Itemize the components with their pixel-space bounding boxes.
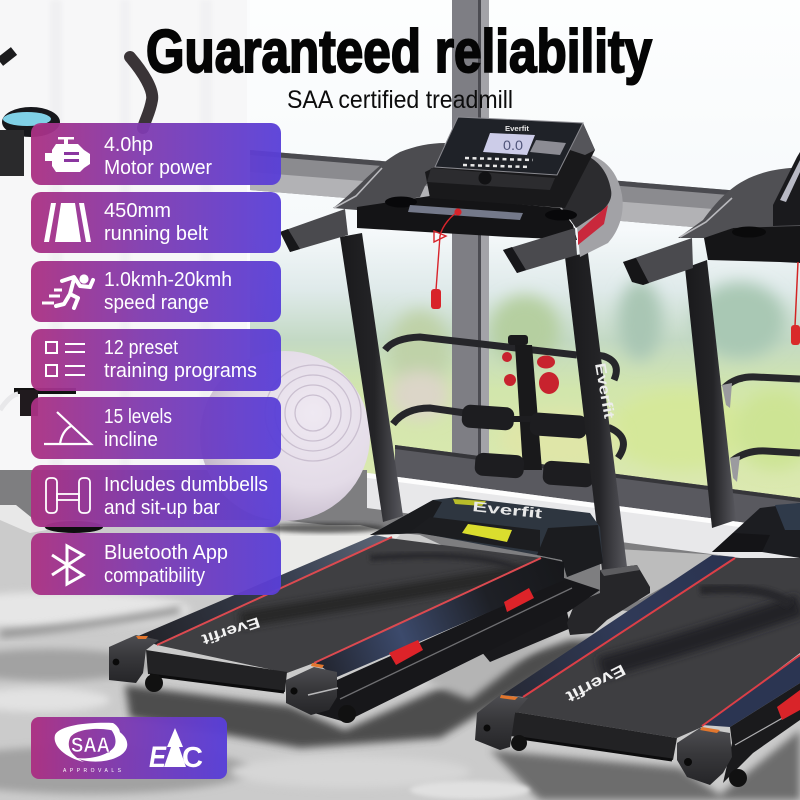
icon: SAA logo: APPROVALS (63, 768, 122, 774)
icon: bluetooth (52, 546, 83, 584)
text: Motor power (104, 157, 212, 179)
red dumbbells (502, 352, 559, 394)
icon: incline angle (44, 412, 91, 444)
title: Guaranteed reliability (146, 18, 653, 85)
exercise ball (200, 351, 385, 533)
subtitle: SAA certified treadmill (287, 86, 513, 114)
console graph (530, 140, 566, 155)
second treadmill caps (475, 695, 732, 785)
text: 450mm (104, 200, 171, 222)
red handles (389, 588, 534, 665)
left grip (280, 209, 348, 252)
running belt (146, 538, 541, 692)
wheels (145, 674, 356, 723)
icon: engine (45, 137, 90, 172)
panel: running belt (31, 192, 281, 253)
motor cover (370, 497, 603, 577)
text: compatibility (104, 565, 205, 587)
second treadmill belt logo: Everfit (562, 660, 628, 705)
icon: dumbbell (46, 478, 90, 513)
panel: bluetooth (31, 533, 281, 595)
text: training programs (104, 360, 257, 382)
second treadmill belt (510, 558, 800, 760)
panel: dumbbells (31, 465, 281, 527)
right grip (503, 228, 577, 273)
text: 12 preset (104, 337, 178, 359)
second treadmill console (623, 152, 800, 345)
center column (508, 335, 542, 470)
panel: incline (31, 397, 281, 459)
icon: SAA logo: SAA (71, 734, 110, 757)
text (104, 337, 257, 382)
panel: training programs (31, 329, 281, 391)
icon: road (44, 203, 91, 242)
console keypad (463, 158, 533, 167)
icon: runner (42, 274, 93, 308)
console display (483, 133, 535, 155)
second treadmill motor cover (712, 503, 800, 558)
red safety cord (431, 208, 462, 309)
console speaker (478, 172, 492, 184)
icon: EMC logo: E (149, 741, 167, 774)
icon: SAA logo (55, 723, 127, 774)
panel: speed range (31, 261, 281, 322)
icon: EMC logo: C (182, 742, 203, 774)
text (104, 406, 172, 451)
text (104, 269, 232, 314)
main treadmill (109, 117, 650, 723)
panel: certifications (31, 717, 227, 779)
text (104, 542, 228, 587)
text (104, 474, 268, 519)
text: 4.0hp (104, 134, 153, 156)
upright logo: Everfit (591, 362, 618, 420)
text: Bluetooth App (104, 542, 228, 564)
second treadmill brackets (722, 383, 740, 482)
text: incline (104, 429, 158, 451)
motor cover logo: Everfit (472, 498, 544, 521)
text (104, 134, 212, 179)
text: 1.0kmh-20kmh (104, 269, 232, 291)
second treadmill, right (475, 152, 800, 787)
console display: 0.0 (503, 137, 523, 153)
text (104, 200, 208, 245)
floor (0, 470, 800, 800)
front caps (109, 635, 338, 715)
handle bars behind (385, 337, 623, 458)
base (314, 565, 650, 722)
console (425, 117, 595, 208)
text: Includes dumbbells (104, 474, 268, 496)
console logo: Everfit (505, 126, 530, 133)
curtain (0, 0, 247, 472)
second treadmill rails (502, 555, 800, 783)
second treadmill rear bars (724, 377, 800, 461)
icon: EMC logo (149, 728, 203, 774)
belt logo: Everfit (200, 613, 262, 648)
handlebar frame (333, 143, 623, 257)
window view (250, 238, 800, 498)
text: speed range (104, 292, 209, 314)
uprights (340, 233, 627, 570)
text: 15 levels (104, 406, 172, 428)
side rails (136, 535, 564, 677)
panel: motor power (31, 123, 281, 185)
text: running belt (104, 223, 208, 245)
second treadmill wheels (511, 735, 747, 787)
icon: list (46, 342, 85, 376)
text: and sit-up bar (104, 497, 220, 519)
second treadmill upright (685, 260, 736, 528)
foam rollers (461, 404, 595, 488)
window frame: mullion and transom (250, 0, 800, 566)
exercise bike behind panels (0, 51, 152, 533)
